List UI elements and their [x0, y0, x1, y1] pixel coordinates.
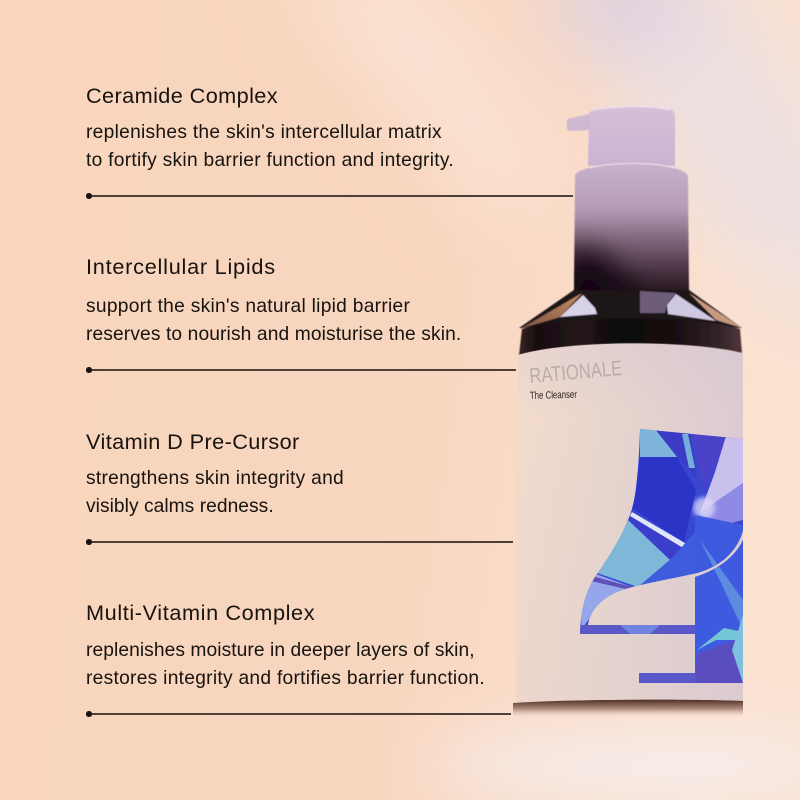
ingredient: Multi-Vitamin Complex: [86, 600, 485, 689]
bottle shoulder: [519, 290, 742, 329]
heading: Ceramide Complex: Ceramide Complex: [86, 83, 278, 108]
bottle collar: [573, 162, 690, 291]
description: Intercellular Lipids: [86, 296, 461, 345]
description: Ceramide Complex: to fortify skin barrier function and integrity.: [86, 150, 454, 171]
heading: Intercellular Lipids: Intercellular Lipids: [86, 254, 276, 279]
leader line: Multi-Vitamin Complex: [86, 713, 511, 715]
brand name on label: RATIONALE: [528, 357, 623, 388]
ingredient: Ceramide Complex: [86, 83, 454, 171]
description: Vitamin D Pre-Cursor: visibly calms redness.: [86, 496, 274, 517]
description: Vitamin D Pre-Cursor: [86, 468, 344, 517]
leader line: Intercellular Lipids: [86, 369, 516, 371]
bottle dark band: [519, 318, 742, 355]
numeral artwork on label: [575, 425, 745, 687]
description: Ceramide Complex: replenishes the skin's intercellular matrix: [86, 122, 442, 143]
product name on label: The Cleanser: [530, 389, 577, 402]
bottle label: [516, 344, 743, 703]
bottle base shadow: [513, 700, 743, 718]
heading: Vitamin D Pre-Cursor: Vitamin D Pre-Cursor: [86, 429, 300, 454]
description: Intercellular Lipids: reserves to nourish and moisturise the skin.: [86, 324, 461, 345]
heading: Multi-Vitamin Complex: Multi-Vitamin Complex: [86, 600, 315, 625]
ingredient: Intercellular Lipids: [86, 254, 461, 345]
description: Intercellular Lipids: support the skin's natural lipid barrier: [86, 296, 410, 317]
description: Ceramide Complex: [86, 122, 454, 171]
leader line: Vitamin D Pre-Cursor: [86, 541, 513, 543]
floor haze: [430, 737, 800, 793]
leader line: Ceramide Complex: [86, 195, 573, 197]
soft lilac light in the top right: [290, 0, 800, 330]
ingredient: Vitamin D Pre-Cursor: [86, 429, 344, 517]
description: Multi-Vitamin Complex: [86, 640, 485, 689]
description: Vitamin D Pre-Cursor: strengthens skin integrity and: [86, 468, 344, 489]
description: Multi-Vitamin Complex: restores integrity and fortifies barrier function.: [86, 668, 485, 689]
description: Multi-Vitamin Complex: replenishes moisture in deeper layers of skin,: [86, 640, 475, 661]
bottle pump head: [567, 107, 675, 166]
